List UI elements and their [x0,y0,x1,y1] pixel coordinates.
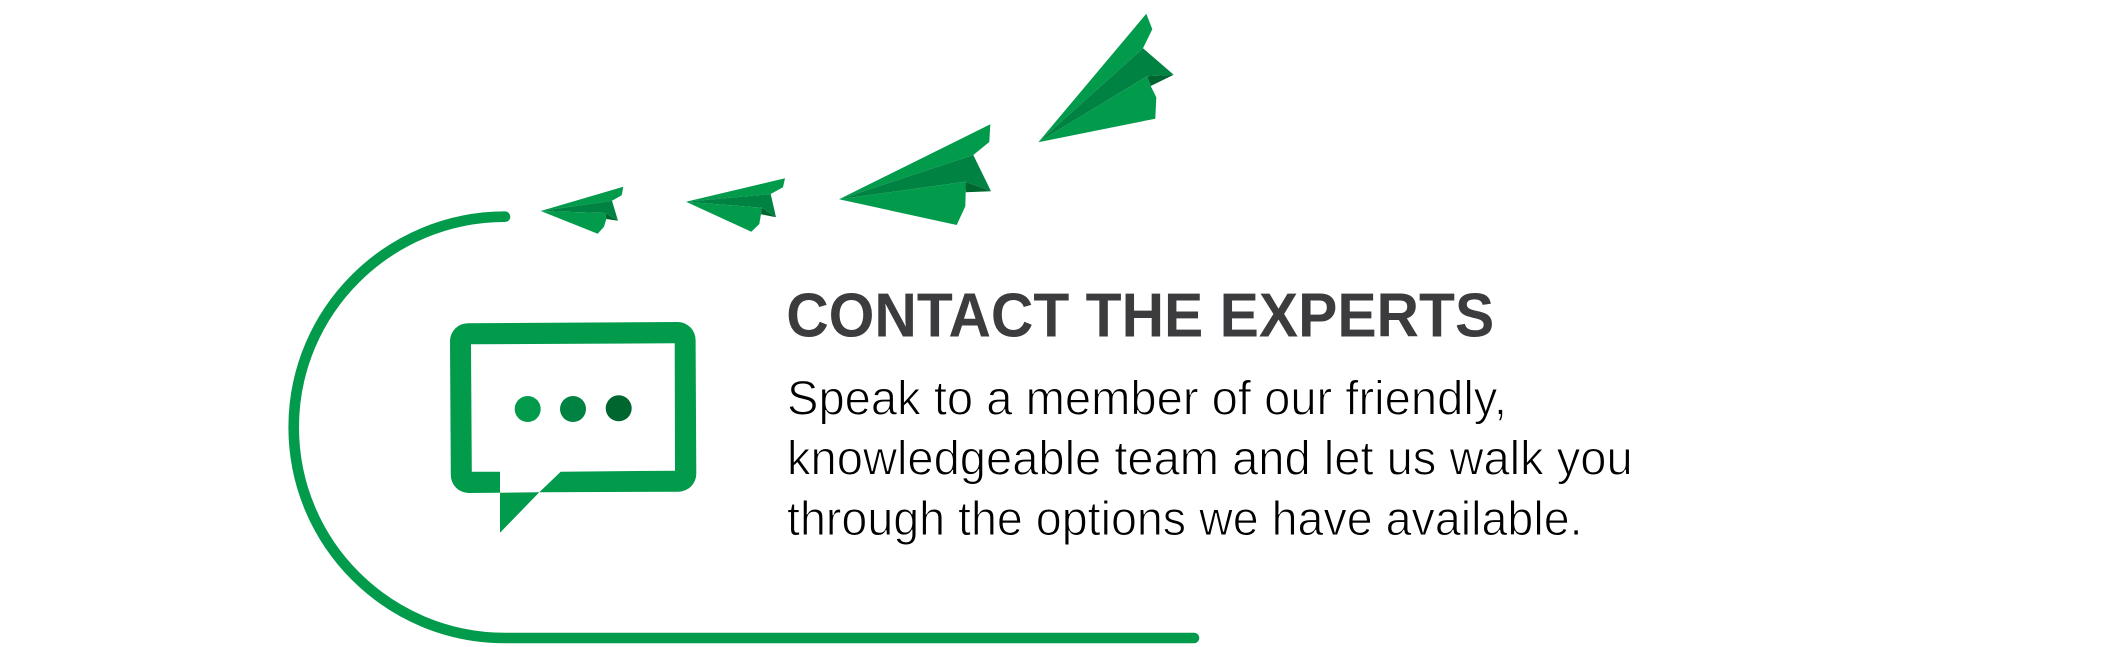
body text [787,371,1633,546]
body text: Speak to a member of our friendly, [787,371,1507,425]
icon: speech bubble [450,322,696,533]
plane 2 [686,178,785,232]
bubble tail [500,492,539,533]
curved path line [294,217,1194,638]
body text: knowledgeable team and let us walk you [787,432,1633,486]
body text: through the options we have available. [787,492,1583,546]
dot 3 [606,395,632,421]
dot 1 [515,396,541,422]
heading: CONTACT THE EXPERTS [786,282,1494,351]
plane 3 [839,124,991,225]
paper planes [541,14,1174,234]
plane 1 (smallest) [541,187,623,234]
dot 2 [560,396,586,422]
bubble outline [450,322,696,493]
plane 4 (largest) [1038,14,1174,142]
